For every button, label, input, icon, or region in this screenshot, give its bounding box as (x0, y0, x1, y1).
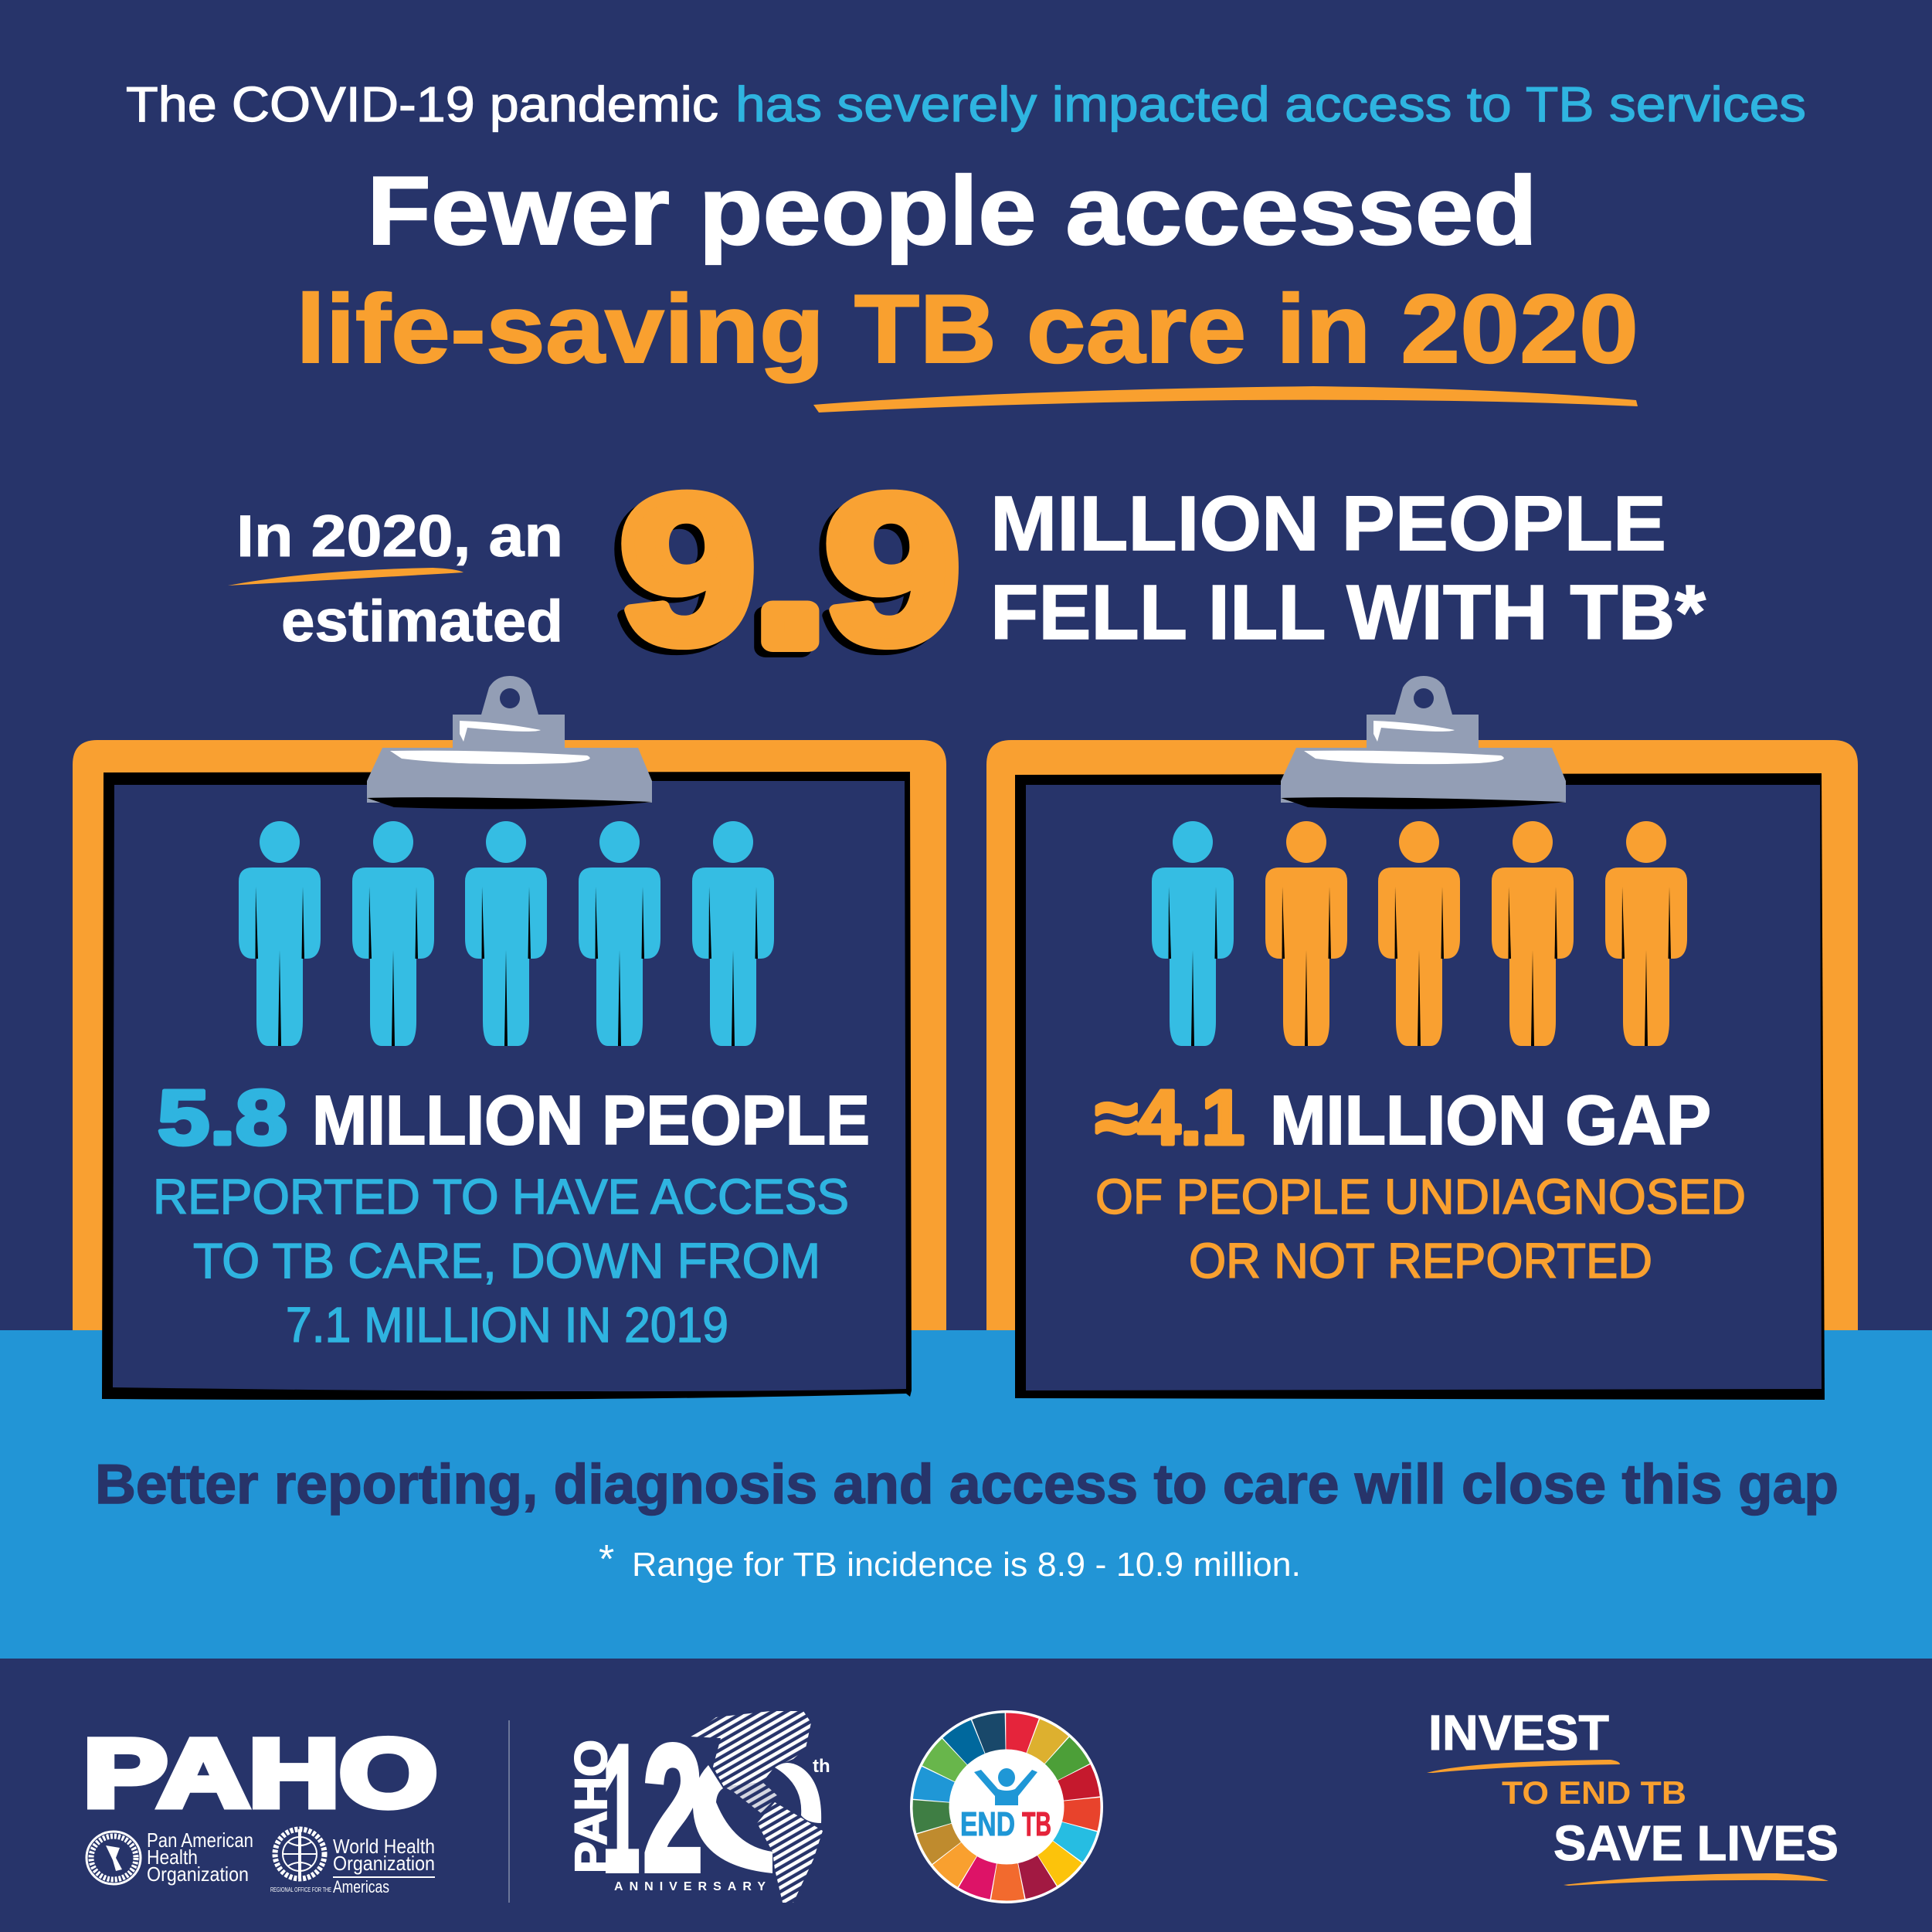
big number 9.9: 9.9 (613, 457, 954, 692)
slogan (1427, 1705, 1839, 1886)
logo: PAHO (83, 1720, 437, 1896)
logo: End TB wheel (900, 1700, 1113, 1913)
subtitle: has severely impacted access to TB services (735, 76, 1806, 132)
logo: PAHO 120th anniversary (566, 1709, 830, 1909)
title: Fewer people accessed (367, 156, 1537, 265)
slogan: TO END TB (1502, 1774, 1686, 1811)
PAHO name: Organization (147, 1862, 249, 1886)
footnote: Range for TB incidence is 8.9 - 10.9 million. (632, 1546, 1301, 1584)
lead-in text (236, 504, 563, 654)
PAHO name: Health (147, 1845, 198, 1869)
WHO name: Americas (333, 1877, 389, 1896)
clip (367, 676, 652, 809)
subtitle: The COVID-19 pandemic (126, 76, 718, 132)
WHO name: Organization (333, 1852, 435, 1875)
slogan: SAVE LIVES (1553, 1815, 1839, 1871)
footnote: * (599, 1537, 614, 1582)
divider (508, 1720, 510, 1903)
description (153, 1169, 849, 1353)
stat 5.8 million: 5.8 (158, 1075, 287, 1161)
call to action: Better reporting, diagnosis and access to care will close this gap (95, 1454, 1839, 1516)
title: life-saving TB care in 2020 (296, 274, 1638, 383)
figure (974, 1768, 1037, 1805)
subtitle (126, 76, 1806, 132)
logo: PAHO 120th anniversary: 1 (603, 1709, 640, 1909)
lead-in text: In 2020, an (236, 504, 563, 569)
logo: PAHO 120th anniversary: ANNIVERSARY (614, 1880, 766, 1893)
million people fell ill (990, 480, 1706, 656)
End TB label: END (960, 1805, 1015, 1843)
clip (1281, 676, 1566, 809)
lead-in underline (228, 568, 463, 586)
panel: reported clipboard (73, 676, 946, 1400)
End TB label: TB (1022, 1805, 1051, 1843)
PAHO name: Pan American (147, 1828, 253, 1852)
stat 5.8 million: MILLION PEOPLE (312, 1082, 870, 1160)
title (296, 156, 1638, 383)
logo: PAHO: PAHO (83, 1720, 437, 1827)
title underline (813, 386, 1638, 413)
million people fell ill: FELL ILL WITH TB* (990, 569, 1706, 656)
people: five blue (239, 821, 774, 1046)
million people fell ill: MILLION PEOPLE (990, 480, 1666, 567)
PAHO name (147, 1828, 253, 1886)
description: TO TB CARE, DOWN FROM (193, 1233, 820, 1289)
description: OF PEOPLE UNDIAGNOSED (1095, 1169, 1746, 1224)
seal (87, 1832, 141, 1884)
description: 7.1 MILLION IN 2019 (286, 1297, 728, 1353)
logo: PAHO 120th anniversary: th (813, 1756, 830, 1777)
stat 4.1 million gap: MILLION GAP (1270, 1082, 1711, 1160)
stat 4.1 million gap: ≈4.1 (1095, 1075, 1244, 1161)
logo: PAHO 120th anniversary: PAHO (566, 1740, 616, 1873)
logo: PAHO 120th anniversary: 2 (643, 1709, 703, 1909)
WHO name: REGIONAL OFFICE FOR THE (270, 1886, 331, 1893)
band: blue table (0, 1330, 1932, 1659)
stat 4.1 million gap (1095, 1075, 1711, 1161)
WHO name (270, 1835, 435, 1896)
WHO name: World Health (333, 1835, 435, 1858)
panel: gap clipboard (986, 676, 1858, 1400)
big number 9.9: 9.9 (620, 452, 961, 687)
people: one blue four orange (1152, 821, 1687, 1046)
lead-in text: estimated (281, 589, 563, 654)
stat 5.8 million (158, 1075, 870, 1161)
slogan: INVEST (1428, 1705, 1609, 1761)
description (1095, 1169, 1746, 1289)
description: REPORTED TO HAVE ACCESS (153, 1169, 849, 1224)
description: OR NOT REPORTED (1189, 1233, 1652, 1289)
WHO emblem (275, 1829, 324, 1879)
